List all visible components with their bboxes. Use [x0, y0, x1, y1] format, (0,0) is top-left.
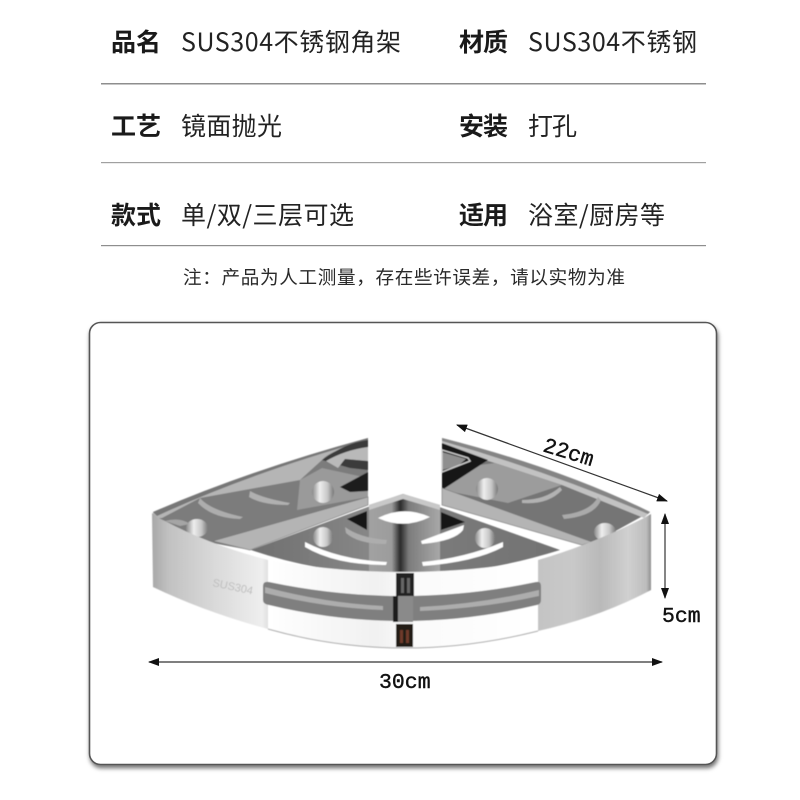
arrow: height 5cm [664, 514, 666, 598]
screws [186, 478, 616, 548]
label: 5cm: 5cm [662, 605, 701, 629]
front center floor [251, 494, 560, 575]
lower slot [396, 624, 413, 647]
front band right section [538, 514, 651, 631]
row 1 left: product name: 品名 [111, 23, 161, 59]
row 2 left: process: 工艺 [111, 107, 161, 143]
arrow: width 30cm [149, 661, 662, 663]
front band center section [268, 560, 538, 648]
row 3 left: style: 单/双/三层可选 [181, 196, 354, 232]
panel: product frame [90, 322, 716, 764]
row 3 right: usage: 浴室/厨房等 [528, 196, 665, 232]
row 2 right: installation: 打孔 [528, 107, 577, 143]
upper slot [396, 573, 414, 596]
row 1 right: material: 材质 [459, 23, 508, 59]
row 2 left: process: 镜面抛光 [181, 107, 282, 143]
row 3 left: style: 款式 [111, 196, 161, 232]
row 3 right: usage: 适用 [459, 196, 508, 232]
front band left section [152, 513, 268, 629]
label: 30cm: 30cm [379, 671, 431, 695]
specifications table [101, 23, 706, 246]
arrow: depth 22cm [457, 425, 667, 501]
row 2 left: process [111, 107, 282, 143]
right back wing [442, 438, 650, 545]
row 3 right: usage [459, 196, 665, 232]
measurement note: 注：产品为人工测量，存在些许误差，请以实物为准 [183, 263, 625, 290]
product photo: corner shelf [152, 438, 651, 648]
embossed logo: SUS304 [211, 577, 254, 597]
label: 22cm: 22cm [540, 435, 596, 473]
left back wing [153, 438, 368, 550]
row 1 left: product name: SUS304不锈钢角架 [181, 23, 401, 59]
band lower edge [268, 629, 538, 648]
row 2 right: installation: 安装 [459, 107, 508, 143]
front band window [263, 582, 541, 622]
row 2 right: installation [459, 107, 577, 143]
row 1 right: material: SUS304不锈钢 [528, 23, 697, 59]
